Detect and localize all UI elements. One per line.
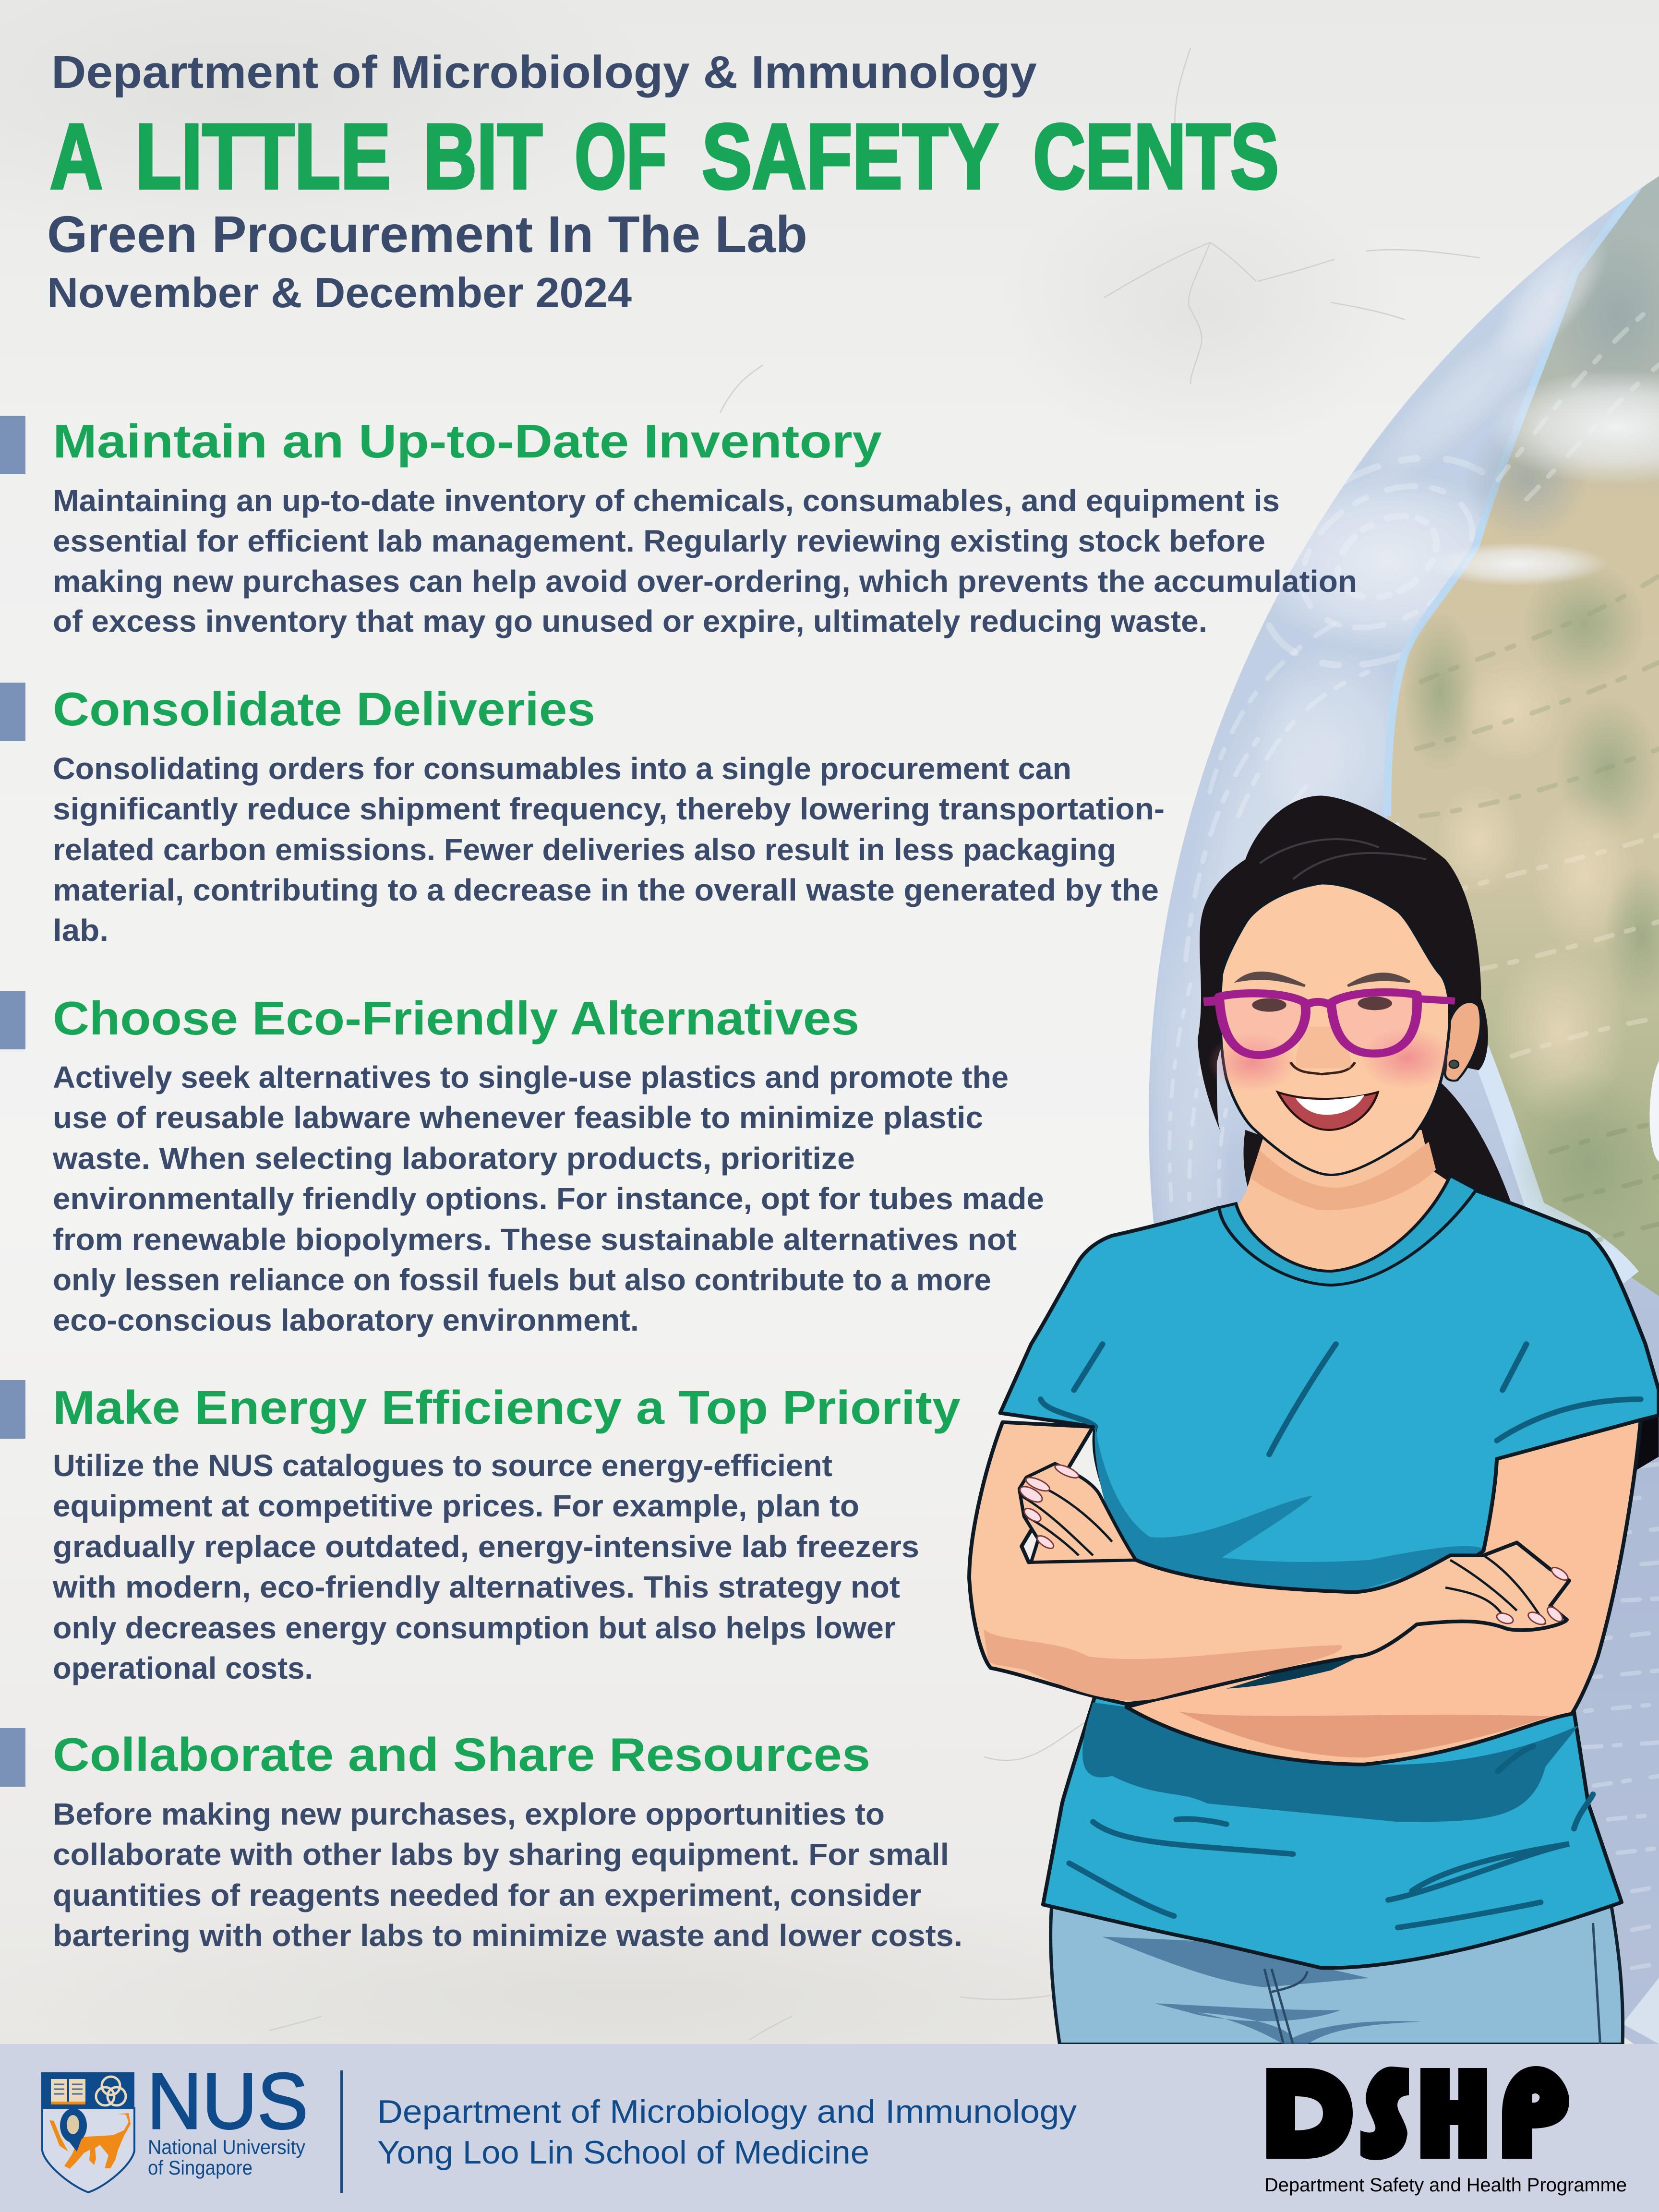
left hand fingers bbox=[1018, 1462, 1136, 1563]
land patches bbox=[1579, 257, 1657, 372]
earring bbox=[1449, 1060, 1459, 1068]
body text: related carbon emissions. Fewer deliveries also result in less packaging bbox=[53, 832, 1116, 867]
body text bbox=[52, 1448, 919, 1685]
three rings bbox=[96, 2077, 126, 2105]
right hand fingers bbox=[1445, 1555, 1570, 1627]
body text: essential for efficient lab management. Regularly reviewing existing stock before bbox=[53, 524, 1265, 558]
panel: collaborate and share bbox=[0, 1728, 962, 1953]
t-shirt bbox=[1000, 1190, 1659, 1968]
shirt collar bbox=[1219, 1176, 1477, 1285]
body text bbox=[53, 751, 1165, 948]
body text: gradually replace outdated, energy-intensive lab freezers bbox=[53, 1529, 919, 1564]
shirt shading bbox=[1095, 1427, 1486, 1592]
body text bbox=[53, 483, 1357, 638]
mouth bbox=[1278, 1092, 1378, 1130]
heading: Consolidate Deliveries bbox=[53, 683, 595, 735]
cloud swirls over ocean bbox=[1147, 250, 1599, 1358]
glasses bbox=[1203, 992, 1455, 1055]
body text: Utilize the NUS catalogues to source energy-efficient bbox=[53, 1448, 832, 1483]
nose bbox=[1291, 1062, 1355, 1074]
lower arm shading bbox=[1179, 1712, 1550, 1757]
main title: LITTLE bbox=[135, 105, 391, 208]
gulf water bbox=[1649, 1061, 1659, 1162]
body text: collaborate with other labs by sharing equipment. For small bbox=[53, 1837, 949, 1872]
heading: Make Energy Efficiency a Top Priority bbox=[53, 1381, 961, 1434]
body text bbox=[53, 1797, 962, 1953]
open book bbox=[51, 2079, 85, 2104]
main title: BIT bbox=[423, 105, 542, 208]
body text: of excess inventory that may go unused or expire, ultimately reducing waste. bbox=[53, 604, 1207, 638]
department name: Yong Loo Lin School of Medicine bbox=[377, 2134, 869, 2171]
heading: Maintain an Up-to-Date Inventory bbox=[53, 415, 882, 468]
DSHP caption: Department Safety and Health Programme bbox=[1264, 2175, 1627, 2196]
panel: energy efficiency bbox=[0, 1380, 961, 1685]
footer divider bbox=[340, 2070, 343, 2193]
shirt gap shadow bbox=[1226, 1654, 1364, 1689]
body text: operational costs. bbox=[53, 1651, 313, 1685]
body text bbox=[52, 1060, 1044, 1337]
section marker bbox=[0, 683, 25, 741]
face bbox=[1220, 883, 1450, 1175]
NUS logo bbox=[41, 2057, 308, 2192]
body text: from renewable biopolymers. These sustainable alternatives not bbox=[53, 1222, 1017, 1257]
body text: with modern, eco-friendly alternatives. This strategy not bbox=[52, 1570, 900, 1604]
ear bbox=[1445, 1002, 1481, 1081]
cloud banks over land bbox=[1452, 244, 1659, 584]
body and arms bbox=[969, 1190, 1659, 2044]
main title: SAFETY bbox=[702, 105, 998, 208]
body text: quantities of reagents needed for an experiment, consider bbox=[53, 1878, 921, 1912]
ponytail behind body bbox=[1244, 1078, 1512, 1222]
sleeve under-shadow bbox=[1636, 1413, 1659, 1470]
body text: bartering with other labs to minimize waste and lower costs. bbox=[53, 1918, 962, 1953]
DSHP letters bbox=[1266, 2066, 1569, 2160]
eyes bbox=[1252, 997, 1392, 1012]
section marker bbox=[0, 1728, 25, 1787]
body text: Maintaining an up-to-date inventory of chemicals, consumables, and equipment is bbox=[53, 483, 1280, 518]
head and neck bbox=[1198, 796, 1488, 1285]
university name: National University bbox=[148, 2136, 305, 2158]
body text: waste. When selecting laboratory products, prioritize bbox=[52, 1141, 855, 1176]
main title: CENTS bbox=[1033, 105, 1279, 208]
header block bbox=[47, 47, 1279, 316]
section marker bbox=[0, 416, 25, 474]
section marker bbox=[0, 1380, 25, 1439]
lion bbox=[49, 2108, 131, 2169]
subtitle: Green Procurement In The Lab bbox=[47, 205, 807, 263]
DSHP logo bbox=[1264, 2066, 1627, 2196]
body text: equipment at competitive prices. For example, plan to bbox=[53, 1489, 859, 1523]
body text: Consolidating orders for consumables into a single procurement can bbox=[53, 751, 1071, 786]
lower forearm bbox=[1126, 1420, 1641, 1765]
body text: only lessen reliance on fossil fuels but also contribute to a more bbox=[53, 1262, 991, 1297]
body text: eco-conscious laboratory environment. bbox=[53, 1303, 639, 1337]
body text: Actively seek alternatives to single-use plastics and promote the bbox=[53, 1060, 1009, 1094]
main title bbox=[50, 105, 1279, 208]
upper forearm bbox=[969, 1422, 1569, 1704]
cheeks bbox=[1207, 1027, 1455, 1092]
body text: significantly reduce shipment frequency, thereby lowering transportation- bbox=[53, 792, 1165, 826]
upper arm shading bbox=[984, 1629, 1342, 1701]
department heading: Department of Microbiology & Immunology bbox=[51, 47, 1037, 98]
body text: only decreases energy consumption but also helps lower bbox=[53, 1611, 896, 1645]
body text: environmentally friendly options. For instance, opt for tubes made bbox=[53, 1181, 1044, 1216]
eyebrows bbox=[1238, 973, 1410, 986]
body text: use of reusable labware whenever feasible to minimize plastic bbox=[53, 1100, 983, 1135]
footer band bbox=[0, 2044, 1659, 2212]
ocean streaks lower right bbox=[1582, 1462, 1659, 1970]
shield crest bbox=[41, 2072, 134, 2192]
NUS logo: of Singapore bbox=[148, 2156, 252, 2179]
hair back bbox=[1198, 796, 1488, 1134]
body text: Before making new purchases, explore opportunities to bbox=[53, 1797, 885, 1831]
main title: A bbox=[50, 105, 103, 208]
panel: consolidate deliveries bbox=[0, 683, 1165, 948]
NUS wordmark: NUS bbox=[147, 2057, 308, 2146]
neck bbox=[1236, 1130, 1455, 1271]
department name: Department of Microbiology and Immunology bbox=[377, 2093, 1077, 2130]
earth globe bbox=[1149, 176, 1659, 2044]
body text: making new purchases can help avoid over-ordering, which prevents the accumulation bbox=[53, 564, 1357, 599]
hair strands front bbox=[1260, 839, 1426, 879]
date: November & December 2024 bbox=[47, 269, 632, 316]
panel: maintain inventory bbox=[0, 415, 1357, 638]
heading: Choose Eco-Friendly Alternatives bbox=[53, 992, 859, 1045]
body text: material, contributing to a decrease in the overall waste generated by the bbox=[53, 873, 1159, 907]
section marker bbox=[0, 991, 25, 1049]
department name bbox=[377, 2093, 1077, 2171]
main title: OF bbox=[575, 105, 667, 208]
illustration: smiling woman with crossed arms bbox=[969, 796, 1659, 2044]
panel: eco-friendly alternatives bbox=[0, 991, 1044, 1337]
heading: Collaborate and Share Resources bbox=[53, 1728, 870, 1781]
land mass bbox=[1387, 158, 1659, 1296]
jeans bbox=[1051, 1895, 1623, 2044]
body text: lab. bbox=[53, 913, 108, 948]
